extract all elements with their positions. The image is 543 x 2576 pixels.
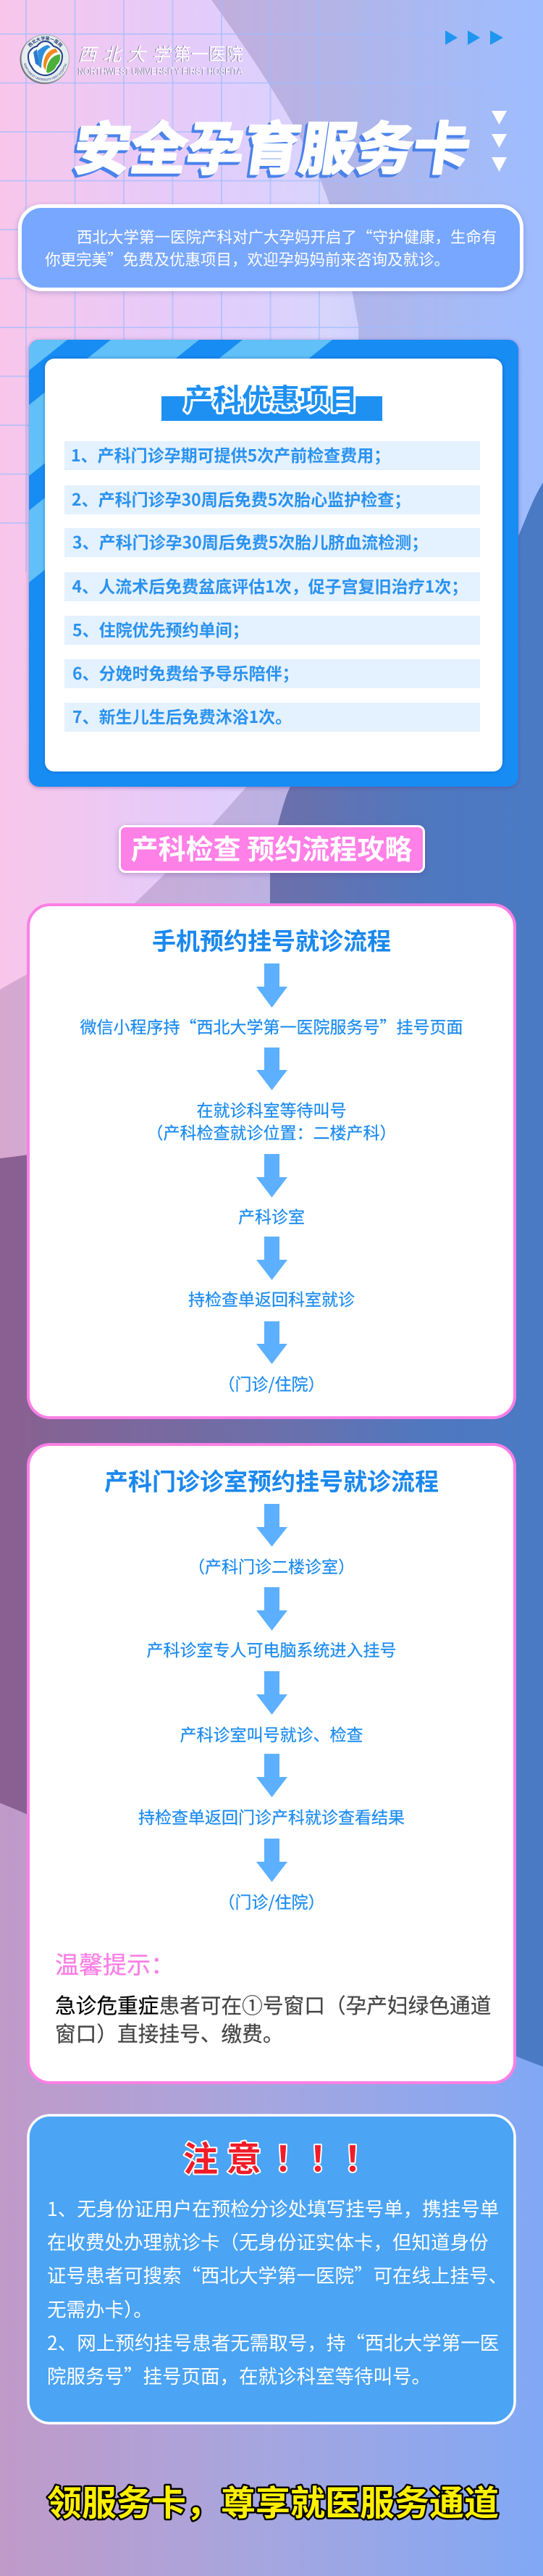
- arrow 5: [256, 1839, 287, 1882]
- heading: notice: 意: [227, 2130, 261, 2181]
- step: return with checklist: 持检查单返回科室就诊: [188, 1286, 355, 1310]
- logo: hospital emblem: [20, 35, 70, 84]
- logo wordmark: 西北大学: [78, 41, 172, 67]
- step: consulting room: 产科诊室: [238, 1203, 305, 1228]
- arrow 5: [256, 1321, 287, 1364]
- panel: intro: 你更完美”免费及优惠项目，欢迎孕妈妈前来咨询及就诊。: [45, 248, 450, 270]
- logo: hospital emblem: NORTHWEST UNIVERSITY FIRST HOSPITAL: [23, 63, 67, 81]
- list item 5: [64, 616, 480, 645]
- text: notice body: [47, 2194, 508, 2389]
- step: review results: 持检查单返回门诊产科就诊查看结果: [138, 1804, 405, 1828]
- arrow 2: [256, 1587, 287, 1631]
- text: emergency reminder: 急诊危重症患者可在①号窗口（孕产妇绿色通道: [55, 1990, 491, 2020]
- list item 1: [64, 441, 480, 470]
- list item 6: [64, 659, 480, 688]
- heading: outpatient booking flow: 产科门诊诊室预约挂号就诊流程: [104, 1463, 439, 1497]
- arrow 2: [256, 1047, 287, 1090]
- list item 6: 6、分娩时免费给予导乐陪伴；: [72, 660, 299, 685]
- list item 2: 2、产科门诊孕30周后免费5次胎心监护检查；: [72, 486, 411, 511]
- arrow 3: [256, 1671, 287, 1715]
- panel: mobile booking flow: [28, 905, 515, 1418]
- heading: mobile booking flow: 手机预约挂号就诊流程: [152, 922, 391, 957]
- logo: hospital emblem: 西北大学第一医院: [28, 36, 62, 48]
- icon: three down-pointing triangles: [492, 111, 507, 172]
- step: wait at department: （产科检查就诊位置：二楼产科）: [146, 1119, 397, 1144]
- arrow 4: [256, 1754, 287, 1797]
- list item 7: 7、新生儿生后免费沐浴1次。: [72, 703, 292, 728]
- title: 安全孕育服务卡: [70, 103, 476, 185]
- list item 2: [64, 485, 480, 514]
- logo wordmark: 第一医院: [174, 40, 243, 65]
- list item 1: 1、产科门诊孕期可提供5次产前检查费用；: [71, 442, 390, 467]
- list item 5: 5、住院优先预约单间；: [72, 616, 249, 641]
- footer slogan: 领服务卡，尊享就医服务通道: [47, 2475, 499, 2525]
- step: second floor: （产科门诊二楼诊室）: [188, 1553, 355, 1578]
- text: emergency reminder: 窗口）直接挂号、缴费。: [55, 2018, 284, 2048]
- heading: obstetric benefits: 产科优惠项目: [184, 376, 358, 418]
- panel: outpatient booking flow: [28, 1444, 515, 2083]
- heading: notice: ！: [344, 2130, 379, 2181]
- step: wait at department: 在就诊科室等待叫号: [197, 1097, 346, 1121]
- panel: obstetric benefits: [29, 340, 518, 787]
- section heading: booking guide: 产科检查 预约流程攻略: [131, 827, 412, 867]
- arrow 1: [256, 963, 287, 1008]
- panel: notice: [28, 2115, 515, 2423]
- text: notice body: 在收费处办理就诊卡（无身份证实体卡，但知道身份: [47, 2227, 488, 2255]
- text: notice body: 1、无身份证用户在预检分诊处填写挂号单，携挂号单: [47, 2194, 499, 2222]
- step: computer registration: 产科诊室专人可电脑系统进入挂号: [146, 1636, 397, 1661]
- list item 7: [64, 703, 480, 732]
- heading: notice: ！: [274, 2130, 309, 2181]
- list item 3: 3、产科门诊孕30周后免费5次胎儿脐血流检测；: [72, 529, 428, 553]
- step: mini program: 微信小程序持“西北大学第一医院服务号”挂号页面: [80, 1013, 463, 1038]
- arrow 3: [256, 1154, 287, 1197]
- step: called for consultation: 产科诊室叫号就诊、检查: [180, 1721, 363, 1746]
- text: notice body: 2、网上预约挂号患者无需取号，持“西北大学第一医: [47, 2328, 499, 2356]
- text: notice body: 院服务号”挂号页面，在就诊科室等待叫号。: [47, 2361, 431, 2389]
- list item 4: 4、人流术后免费盆底评估1次，促子宫复旧治疗1次；: [72, 573, 468, 598]
- step: wait at department: [146, 1097, 397, 1144]
- heading: notice: 注: [183, 2130, 218, 2181]
- logo wordmark: NORTHWEST UNIVERSITY FIRST HOSPITA: [78, 65, 243, 77]
- text: emergency reminder: [55, 1990, 491, 2048]
- icon: three right-pointing triangles: [445, 30, 503, 45]
- logo wordmark: [78, 40, 243, 77]
- panel: intro: 西北大学第一医院产科对广大孕妈开启了“守护健康，生命有: [77, 225, 497, 248]
- step: outpatient or inpatient: （门诊/住院）: [218, 1889, 325, 1913]
- panel: intro: [20, 206, 521, 290]
- heading: notice: ！: [309, 2130, 344, 2181]
- text: notice body: 无需办卡）。: [47, 2294, 153, 2322]
- step: outpatient or inpatient: （门诊/住院）: [218, 1371, 325, 1395]
- heading: warm reminder: 温馨提示：: [55, 1946, 174, 1981]
- arrow 4: [256, 1237, 287, 1280]
- arrow 1: [256, 1504, 287, 1547]
- text: notice body: 证号患者可搜索“西北大学第一医院”可在线上挂号、: [47, 2260, 508, 2288]
